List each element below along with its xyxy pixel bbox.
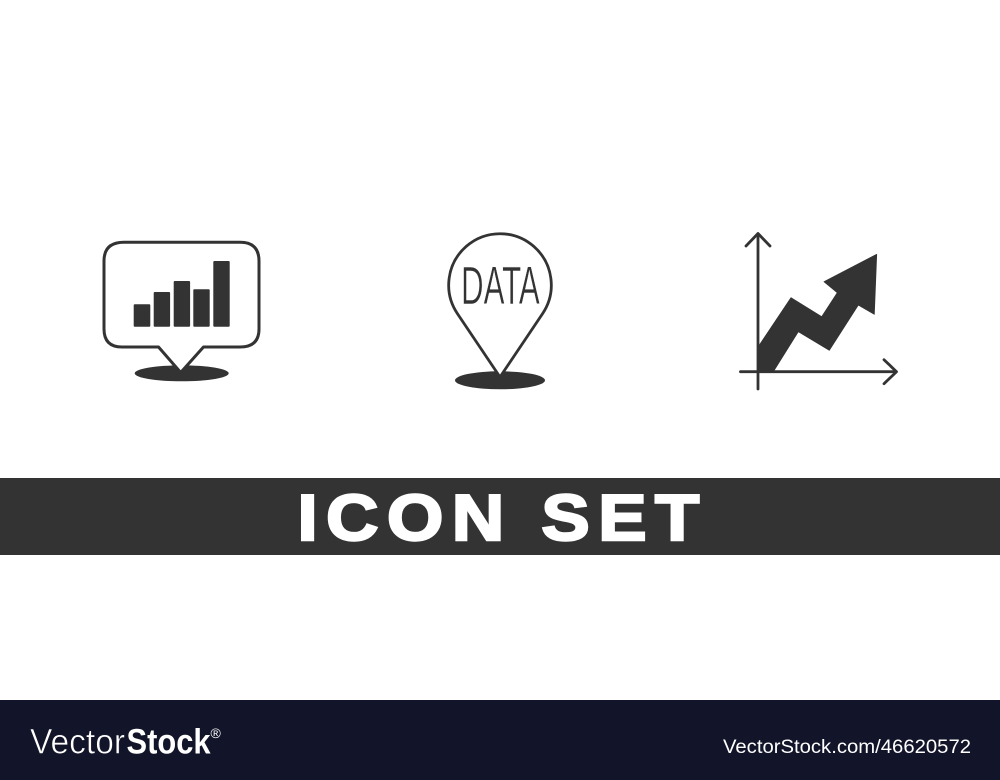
- footer logo: [30, 722, 211, 762]
- pin label: DATA: [461, 256, 540, 316]
- footer bar: [0, 700, 1000, 780]
- bubble base shadow: [135, 365, 229, 381]
- speech bubble outline: [104, 242, 259, 372]
- icon: rising arrow chart: [740, 234, 896, 389]
- registered mark: ®: [210, 725, 222, 741]
- pin base shadow: [455, 371, 545, 389]
- rising arrow: [758, 254, 877, 372]
- title band: [0, 478, 1000, 555]
- chart axes: [740, 234, 896, 389]
- title text: ICON SET: [298, 482, 708, 554]
- bar chart: [134, 261, 230, 327]
- pin outline: [449, 234, 551, 377]
- icon: data location pin: [449, 234, 551, 389]
- icon: speech bubble with bar chart: [104, 242, 259, 381]
- footer logo: Vector: [30, 722, 125, 762]
- footer logo: Stock: [126, 722, 211, 762]
- footer image id: VectorStock.com/46620572: [723, 737, 971, 758]
